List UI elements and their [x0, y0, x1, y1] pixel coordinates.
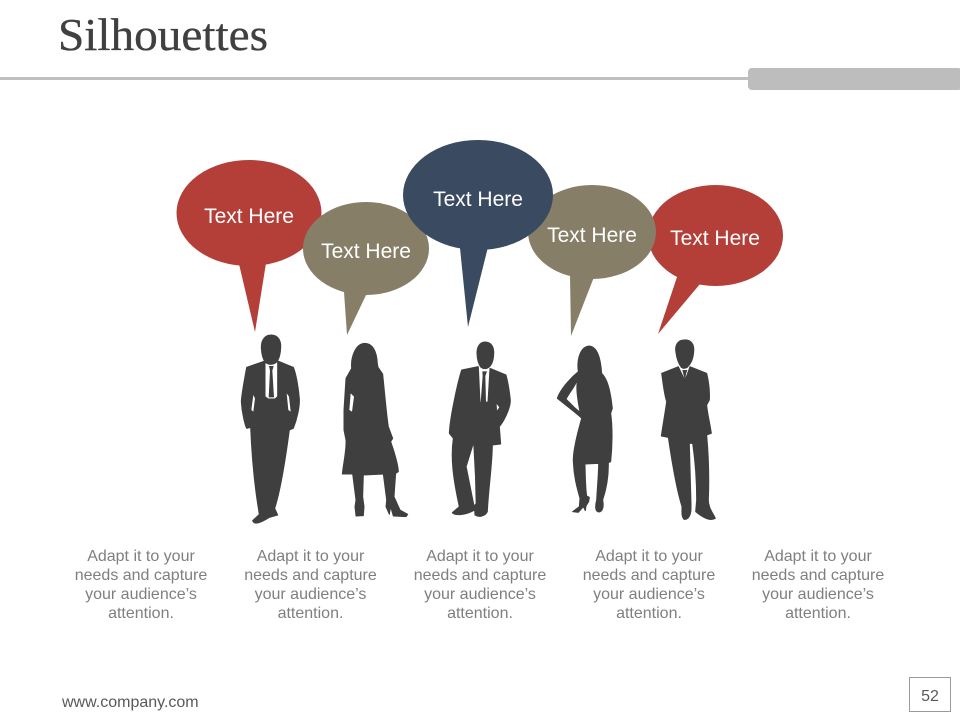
caption 1: needs and capture	[75, 567, 207, 584]
caption 5	[752, 548, 884, 622]
caption 2	[244, 548, 377, 622]
caption 4: your audience’s	[593, 586, 705, 603]
caption 3	[414, 548, 546, 622]
caption 5: your audience’s	[762, 586, 874, 603]
header rule	[0, 77, 750, 80]
caption 5: attention.	[785, 605, 851, 622]
caption 4: Adapt it to your	[595, 548, 703, 565]
speech bubble: tan right	[528, 185, 656, 336]
bubble labels: Text Here	[321, 240, 411, 263]
caption 1: Adapt it to your	[87, 548, 195, 565]
caption 2: Adapt it to your	[257, 548, 365, 565]
caption 5: Adapt it to your	[764, 548, 872, 565]
bubble labels	[204, 188, 760, 263]
silhouette: man in suit 2	[449, 342, 510, 516]
bubble labels: Text Here	[547, 224, 637, 247]
caption 3: your audience’s	[424, 586, 536, 603]
title: Silhouettes	[58, 9, 268, 60]
caption 4: needs and capture	[583, 567, 715, 584]
caption 1	[75, 548, 207, 622]
speech bubble: red right	[648, 185, 783, 334]
caption 4	[583, 548, 715, 622]
caption 3: needs and capture	[414, 567, 546, 584]
page number: 52	[921, 688, 939, 705]
header tab	[748, 68, 960, 90]
bubble labels: Text Here	[204, 205, 294, 228]
bubble labels: Text Here	[670, 227, 760, 250]
caption 5: needs and capture	[752, 567, 884, 584]
caption 2: your audience’s	[255, 586, 366, 603]
speech bubble: tan left	[303, 202, 429, 335]
speech bubble: red left	[176, 160, 322, 332]
caption 4: attention.	[616, 605, 682, 622]
caption 3: Adapt it to your	[426, 548, 534, 565]
caption 2: needs and capture	[244, 567, 377, 584]
silhouette: man in suit 1	[241, 335, 299, 523]
bubble labels: Text Here	[433, 188, 523, 211]
speech bubble: navy centre	[403, 140, 553, 327]
silhouette: woman with hand on hip	[557, 346, 612, 512]
caption 1: attention.	[108, 605, 174, 622]
silhouette: man with crossed arms	[661, 340, 715, 519]
page number	[910, 678, 950, 712]
caption 2: attention.	[278, 605, 343, 622]
footer website: www.company.com	[61, 694, 199, 711]
silhouette: woman in long coat	[342, 343, 408, 517]
caption 3: attention.	[447, 605, 513, 622]
caption 1: your audience’s	[85, 586, 197, 603]
